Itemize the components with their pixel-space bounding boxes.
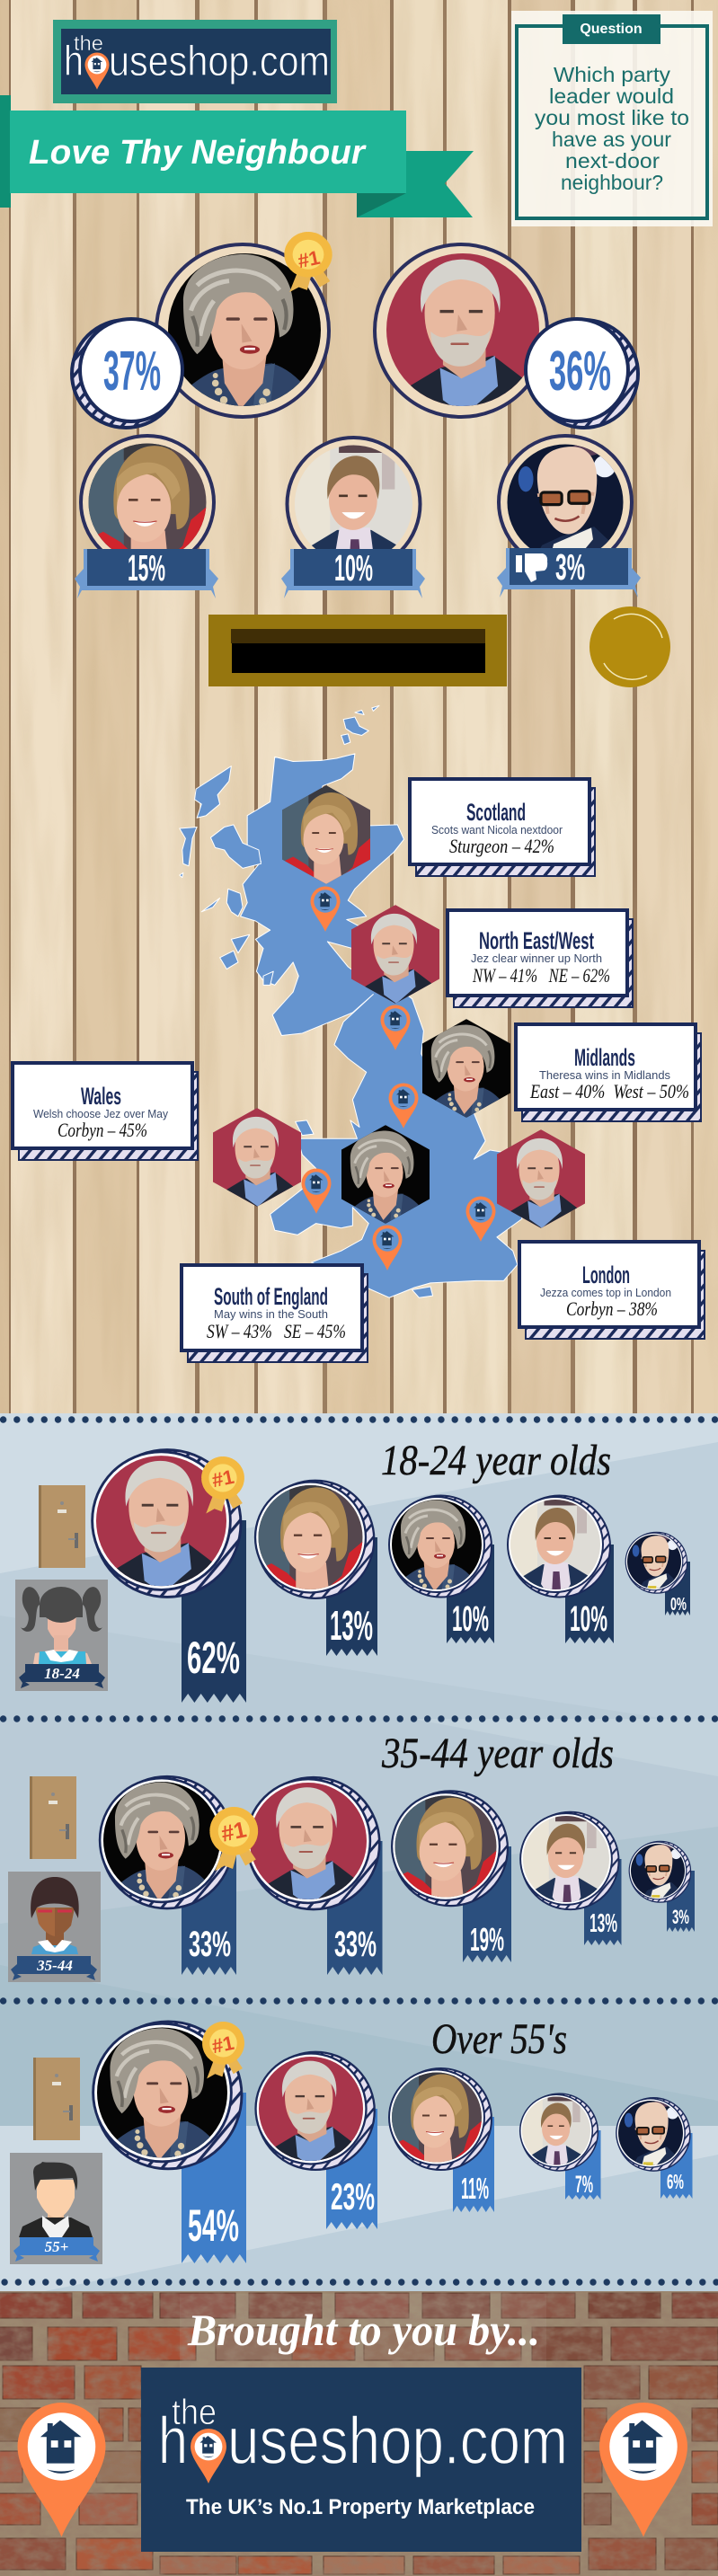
portrait: Sturgeon 15%	[75, 436, 218, 598]
icon: logo pin	[84, 52, 110, 90]
callout: London: Corbyn – 38%	[566, 1297, 658, 1320]
callout: South of England: South of England	[214, 1283, 328, 1310]
portrait: Farron 10%: 10%	[334, 547, 373, 589]
callout: Midlands: Midlands	[574, 1044, 635, 1071]
ribbon: Sturgeon 13%: 13%	[330, 1602, 373, 1649]
ribbon: Sturgeon 11%: 11%	[461, 2172, 489, 2205]
dotted divider	[0, 1997, 718, 2005]
callout: Scotland: Scots want Nicola nextdoor	[431, 824, 563, 837]
ribbon: Nuttall 3%: 3%	[672, 1906, 689, 1928]
callout: Scotland	[410, 779, 595, 876]
callout: South of England: May wins in the South	[214, 1308, 328, 1321]
icon: thumbs down	[516, 553, 547, 582]
letterbox	[208, 615, 507, 686]
portrait: Farron	[519, 2093, 598, 2171]
ribbon: Sturgeon 19%	[463, 1846, 511, 1962]
callout: South of England: SW – 43% SE – 45%	[207, 1320, 346, 1342]
icon: door 35-44	[30, 1776, 76, 1859]
icon: number one medal 35-44	[212, 1809, 256, 1871]
ribbon: Nuttall 0%	[665, 1562, 690, 1616]
portrait: May	[92, 2020, 242, 2169]
question panel: leader would	[549, 84, 674, 108]
icon: right footer pin	[599, 2403, 687, 2536]
callout: London: Jezza comes top in London	[540, 1287, 671, 1299]
callout: Scotland: Scotland	[466, 799, 526, 826]
logo: top: useshop.com	[109, 37, 330, 84]
portrait: May	[99, 1775, 233, 1908]
footer: brought to you by: Brought to you by...	[187, 2305, 540, 2355]
icon: left footer pin	[18, 2403, 106, 2536]
ribbon: Sturgeon 19%: 19%	[470, 1921, 504, 1958]
portrait: Farron	[519, 1810, 619, 1909]
door knob	[589, 606, 670, 687]
portrait: Corbyn 36%: 36%	[549, 341, 611, 403]
map of Great Britain	[180, 705, 522, 1297]
ribbon: May 10%: 10%	[452, 1599, 489, 1639]
question panel: Which party	[554, 63, 671, 86]
ribbon: Corbyn 23%: 23%	[331, 2175, 375, 2217]
ribbon: Corbyn 62%: 62%	[187, 1633, 240, 1683]
icon: number one medal 55+: #1	[210, 2032, 236, 2058]
ribbon: Farron 13%: 13%	[589, 1909, 617, 1938]
question panel: neighbour?	[561, 171, 663, 194]
callout: London	[519, 1242, 705, 1339]
portrait: Nuttall	[625, 1531, 687, 1593]
icon: number one medal, top	[287, 234, 330, 292]
ribbon: Nuttall 6%: 6%	[667, 2170, 684, 2193]
portrait: Corbyn	[91, 1447, 241, 1597]
ribbon: Sturgeon 11%	[453, 2117, 494, 2212]
ribbon: Farron 7%	[565, 2130, 600, 2200]
icon: door 55+	[33, 2058, 80, 2140]
ribbon: Corbyn 62%	[182, 1520, 246, 1703]
callout: North East/West: North East/West	[479, 927, 594, 954]
callout: London: London	[582, 1261, 630, 1288]
ribbon: Nuttall 0%: 0%	[670, 1595, 687, 1615]
ribbon: Farron 10%: 10%	[570, 1599, 607, 1639]
ribbon: Farron 10%	[565, 1545, 614, 1643]
portrait: Nuttall	[616, 2097, 690, 2171]
portrait: Corbyn	[254, 2050, 375, 2170]
hexagon: Corbyn London	[497, 1129, 585, 1228]
icon: number one medal 18-24: #1	[210, 1465, 236, 1492]
callout: Scotland: Sturgeon – 42%	[449, 835, 554, 857]
question panel: next-door	[565, 149, 660, 173]
callout: North East/West: Jez clear winner up North	[471, 952, 602, 965]
hexagon: May south	[341, 1125, 430, 1224]
avatar: woman 35-44: 35-44	[36, 1957, 73, 1974]
logo: top: the	[74, 31, 103, 55]
portrait: May 37%: 37%	[103, 341, 161, 403]
ribbon: Corbyn 33%	[327, 1841, 383, 1975]
callout: North East/West: NW – 41% NE – 62%	[472, 964, 610, 987]
ribbon: May 33%	[182, 1840, 236, 1975]
ribbon: Sturgeon 13%	[326, 1537, 377, 1656]
footer logo panel: useshop.com	[227, 2403, 568, 2478]
title ribbon: Love Thy Neighbour	[29, 134, 367, 172]
portrait: Corbyn 36%	[375, 244, 638, 428]
portrait: Sturgeon	[388, 2067, 492, 2170]
question panel: have as your	[552, 128, 671, 151]
footer logo panel: h	[158, 2403, 188, 2478]
portrait: Sturgeon	[391, 1790, 508, 1906]
ribbon: May 33%: 33%	[189, 1925, 231, 1964]
portrait: May 37%	[72, 244, 329, 428]
callout: North East/West	[448, 910, 633, 1007]
panel: 35-44 year olds	[8, 1730, 695, 1982]
portrait: Farron	[507, 1494, 610, 1598]
portrait: May	[388, 1494, 492, 1598]
callout: Midlands: Theresa wins in Midlands	[539, 1069, 670, 1082]
icon: door 18-24	[39, 1485, 85, 1568]
ribbon: Corbyn 23%	[326, 2109, 377, 2229]
ribbon: Farron 13%	[584, 1859, 622, 1945]
callout: South of England	[182, 1265, 368, 1362]
icon: footer logo pin	[191, 2429, 226, 2483]
ribbon: May 10%	[447, 1545, 494, 1643]
ribbon: May 54%	[182, 2093, 246, 2263]
hexagon: Sturgeon	[282, 785, 370, 884]
demographic section background	[0, 1413, 718, 2291]
title ribbon	[0, 95, 474, 217]
heading: 18-24: 18-24 year olds	[381, 1437, 611, 1484]
panel: Over 55's	[10, 2015, 692, 2264]
portrait: Nuttall 3%: 3%	[555, 546, 585, 588]
portrait: Farron 10%	[281, 438, 425, 598]
brick wall footer background	[0, 2291, 718, 2576]
ribbon: Nuttall 6%	[660, 2133, 692, 2199]
avatar: man 55+	[10, 2153, 102, 2264]
portrait: Nuttall	[629, 1840, 691, 1902]
icon: number one medal, top: #1	[296, 246, 322, 272]
map hexagon portraits	[213, 785, 585, 1228]
map location pins	[302, 886, 496, 1270]
footer logo panel	[141, 2368, 581, 2552]
question panel: you most like to	[535, 106, 689, 129]
avatar: woman 35-44	[8, 1872, 101, 1982]
icon: number one medal 35-44: #1	[219, 1817, 249, 1847]
footer: brought to you by	[180, 2294, 546, 2368]
hexagon: Corbyn Wales	[213, 1108, 301, 1207]
icon: number one medal 55+	[204, 2023, 243, 2078]
dotted divider	[0, 1416, 718, 1423]
heading: Over 55's: Over 55's	[431, 2015, 567, 2063]
hexagon: May midlands	[422, 1019, 510, 1118]
portrait: Sturgeon	[254, 1479, 374, 1598]
question panel	[511, 11, 713, 226]
avatar: girl 18-24	[15, 1580, 108, 1691]
logo: top	[53, 20, 337, 103]
hexagon: Corbyn north	[351, 905, 439, 1004]
icon: number one medal 18-24	[203, 1458, 243, 1513]
ribbon: Farron 7%: 7%	[575, 2171, 593, 2198]
portrait: Sturgeon 15%: 15%	[128, 547, 165, 589]
callout: Wales: Wales	[81, 1083, 121, 1110]
logo: top: h	[64, 37, 84, 84]
callout: Wales: Corbyn – 45%	[58, 1119, 147, 1141]
footer logo panel: the	[172, 2393, 217, 2432]
question panel: Question	[580, 22, 643, 37]
panel: 18-24 year olds	[15, 1437, 690, 1703]
ribbon: Nuttall 3%	[667, 1871, 695, 1932]
ribbon: May 54%: 54%	[188, 2200, 239, 2251]
footer logo panel: The UK’s No.1 Property Marketplace	[186, 2495, 535, 2519]
avatar: girl 18-24: 18-24	[44, 1665, 80, 1682]
callout: Wales: Welsh choose Jez over May	[33, 1108, 169, 1120]
avatar: man 55+: 55+	[45, 2238, 68, 2255]
wood plank background	[0, 0, 718, 1417]
portrait: Corbyn	[245, 1775, 379, 1909]
dotted divider	[2, 2279, 718, 2286]
callout: Midlands	[516, 1024, 701, 1121]
heading: 35-44: 35-44 year olds	[381, 1730, 614, 1777]
callout: Wales	[13, 1063, 198, 1160]
dotted divider	[0, 1715, 718, 1722]
ribbon: Corbyn 33%: 33%	[334, 1925, 377, 1964]
portrait: Nuttall 3%	[497, 436, 641, 598]
